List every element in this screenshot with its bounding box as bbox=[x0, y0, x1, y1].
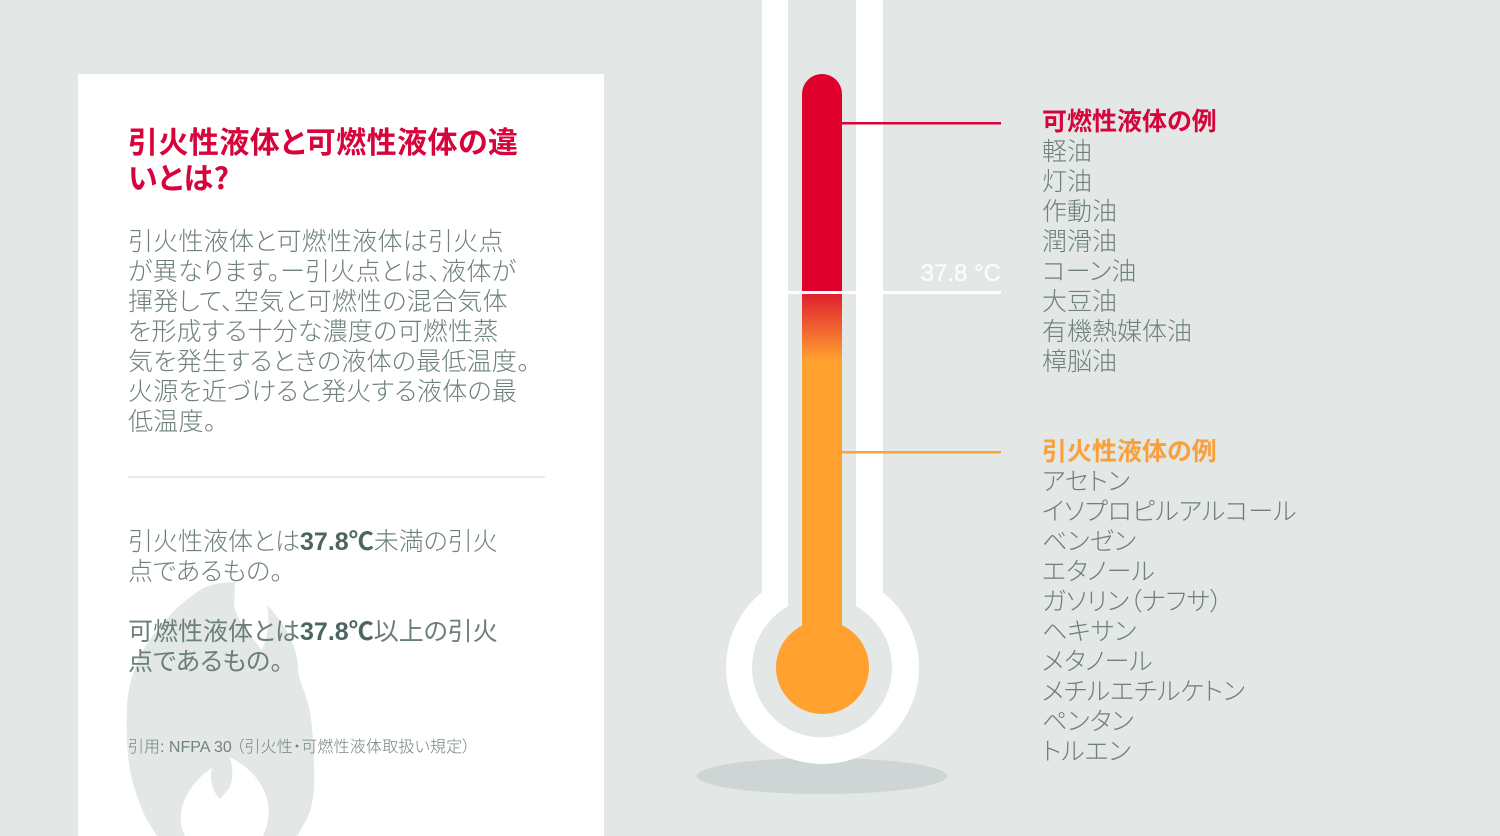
text block: flammable definition: 点であるもの。 bbox=[128, 558, 283, 586]
list: flammable liquids: メタノール bbox=[1042, 648, 1153, 676]
panel: explanation card bbox=[78, 74, 604, 836]
list heading: flammable: 引火性液体の例 bbox=[1042, 438, 1217, 466]
text block: flammable definition: 引火性液体とは37.8℃未満の引火 bbox=[128, 528, 498, 556]
text block: flash point explanation: が異なります。ー引火点とは、液体が bbox=[128, 258, 516, 286]
text block: flash point explanation bbox=[128, 228, 530, 436]
thermometer glass tube bbox=[726, 0, 919, 764]
text block: flash point explanation: 揮発して、空気と可燃性の混合気体 bbox=[128, 288, 508, 316]
thermometer orange column and bulb bbox=[776, 359, 869, 714]
list: flammable liquids: ガソリン（ナフサ） bbox=[1042, 588, 1223, 616]
list: combustible liquids: 灯油 bbox=[1042, 168, 1092, 196]
list: combustible liquids: 有機熱媒体油 bbox=[1042, 318, 1192, 346]
list: flammable liquids: ペンタン bbox=[1042, 708, 1134, 736]
heading: いとは? bbox=[128, 154, 229, 198]
list: combustible liquids: コーン油 bbox=[1042, 258, 1136, 286]
list: flammable liquids: エタノール bbox=[1042, 558, 1155, 586]
temperature label: 37.8 °C bbox=[921, 260, 1001, 287]
text block: flash point explanation: 引火性液体と可燃性液体は引火点 bbox=[128, 228, 504, 256]
list: combustible liquids: 軽油 bbox=[1042, 138, 1092, 166]
heading: 引火性液体と可燃性液体の違 bbox=[128, 127, 518, 160]
text block: flash point explanation: を形成する十分な濃度の可燃性蒸 bbox=[128, 318, 499, 346]
thermometer shadow bbox=[697, 758, 947, 794]
text block: flash point explanation: 気を発生するときの液体の最低温度。 bbox=[128, 348, 530, 376]
list: combustible liquids: 樟脳油 bbox=[1042, 348, 1117, 376]
list: flammable liquids bbox=[1042, 438, 1296, 766]
thermometer red section bbox=[802, 74, 842, 291]
list: flammable liquids: メチルエチルケトン bbox=[1042, 678, 1245, 706]
list: combustible liquids: 潤滑油 bbox=[1042, 228, 1117, 256]
list: combustible liquids: 作動油 bbox=[1042, 198, 1117, 226]
thermometer gradient section bbox=[802, 294, 842, 360]
list: flammable liquids: ヘキサン bbox=[1042, 618, 1137, 646]
list: flammable liquids: ベンゼン bbox=[1042, 528, 1136, 556]
list: combustible liquids bbox=[1042, 108, 1217, 376]
text block: combustible definition bbox=[128, 618, 498, 676]
list: flammable liquids: アセトン bbox=[1042, 468, 1130, 496]
threshold line bbox=[788, 291, 1001, 294]
leader line: combustible bbox=[842, 122, 1001, 124]
list: flammable liquids: イソプロピルアルコール bbox=[1042, 498, 1296, 526]
text block: combustible definition: 点であるもの。 bbox=[128, 648, 283, 676]
leader line: flammable bbox=[842, 451, 1001, 454]
text block: flammable definition bbox=[128, 528, 498, 586]
text block: flash point explanation: 低温度。 bbox=[128, 408, 217, 436]
list: combustible liquids: 大豆油 bbox=[1042, 288, 1117, 316]
list heading: combustible: 可燃性液体の例 bbox=[1042, 108, 1217, 136]
text block: flash point explanation: 火源を近づけると発火する液体の最 bbox=[128, 378, 517, 406]
list: flammable liquids: トルエン bbox=[1042, 738, 1131, 766]
text block: combustible definition: 可燃性液体とは37.8℃以上の引火 bbox=[128, 618, 498, 646]
citation: 引用: NFPA 30 （引火性・可燃性液体取扱い規定） bbox=[128, 739, 470, 756]
heading bbox=[128, 127, 518, 198]
